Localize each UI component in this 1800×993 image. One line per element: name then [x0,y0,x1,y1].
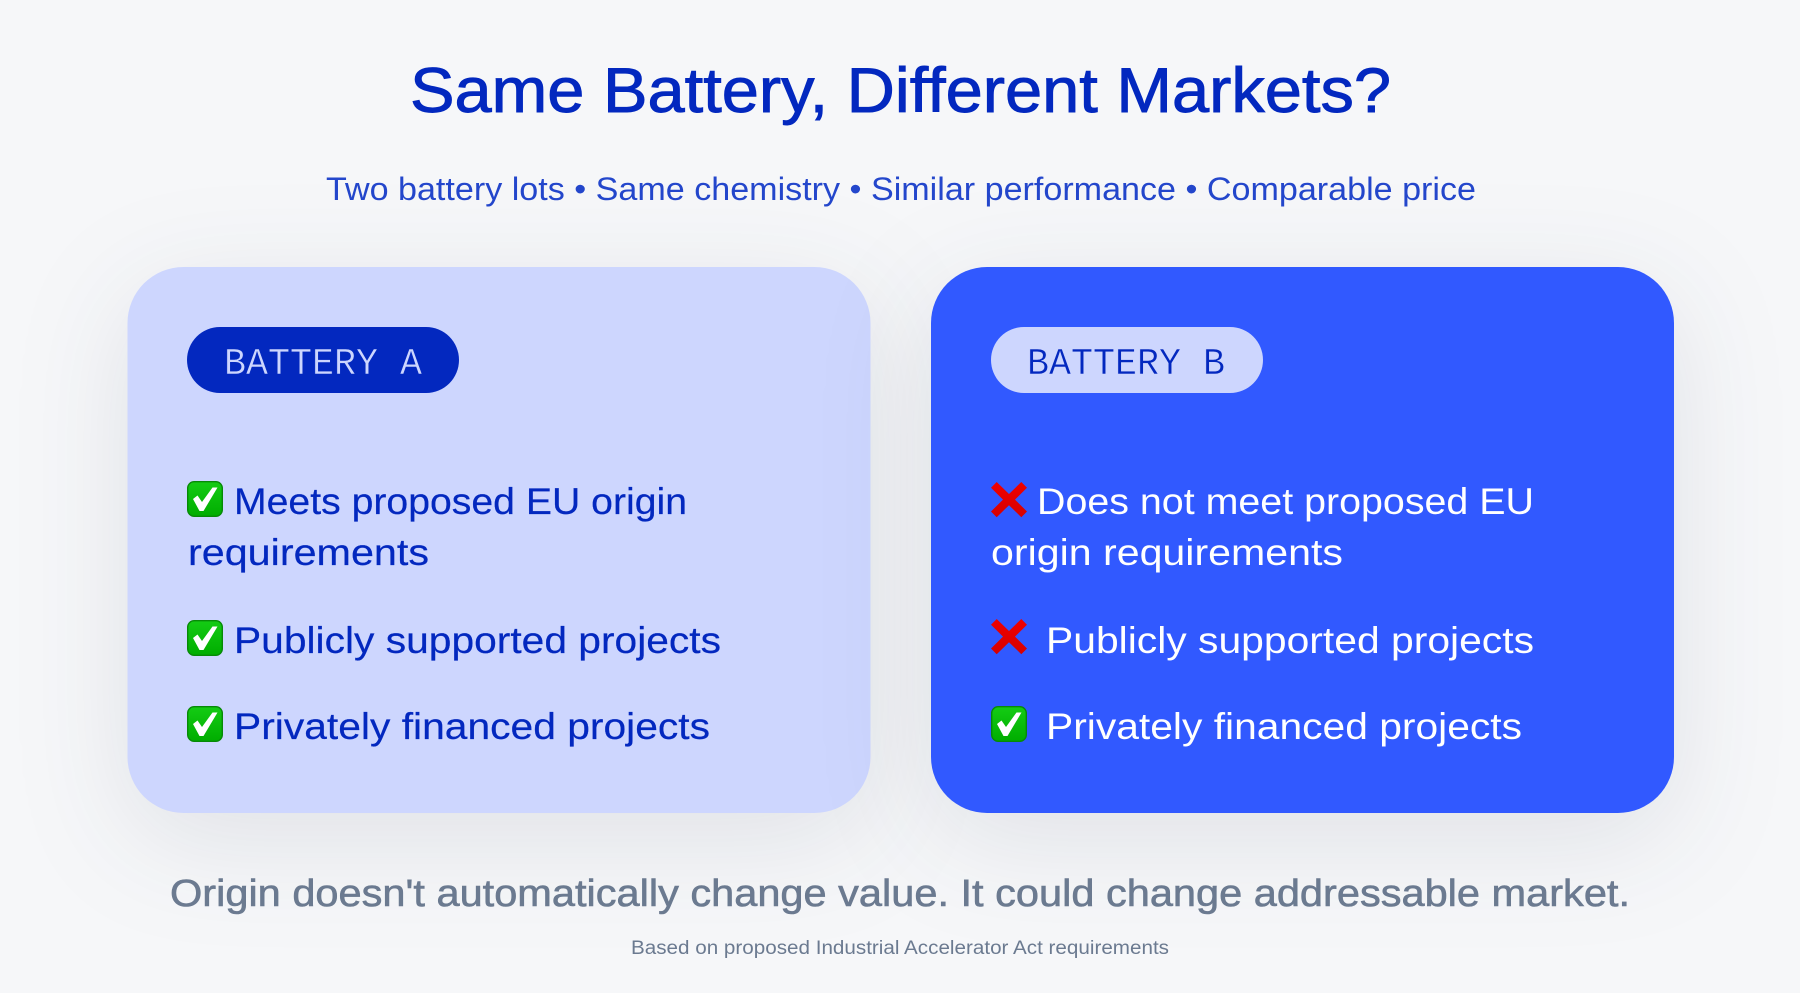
item: does not meet EU origin requirements: origin requirements [991,532,1343,573]
badge: battery A [187,327,459,393]
badge: battery A: BATTERY A [224,343,422,386]
item: publicly supported projects: Publicly supported projects [234,620,721,661]
subtitle: Two battery lots • Same chemistry • Similar performance • Comparable price [326,171,1476,207]
item: meets EU origin requirements [188,481,687,573]
title: Same Battery, Different Markets? [410,56,1391,126]
footnote: Based on proposed Industrial Accelerator Act requirements [631,938,1169,959]
item: meets EU origin requirements: Meets proposed EU origin [234,481,687,522]
item: does not meet EU origin requirements [991,481,1534,573]
panel: battery B [931,267,1674,813]
item: meets EU origin requirements: requirements [188,532,429,573]
card background B [931,267,1674,813]
card background A [128,267,870,813]
badge: battery B: BATTERY B [1027,343,1225,386]
item: publicly supported projects: Publicly supported projects [1046,620,1534,661]
item: privately financed projects: Privately financed projects [1046,706,1522,747]
takeaway text: Origin doesn't automatically change value. It could change addressable market. [170,873,1630,915]
badge: battery B [991,327,1263,393]
item: does not meet EU origin requirements: Does not meet proposed EU [1037,481,1534,522]
panel: battery A [128,267,870,813]
item: privately financed projects: Privately financed projects [234,706,710,747]
